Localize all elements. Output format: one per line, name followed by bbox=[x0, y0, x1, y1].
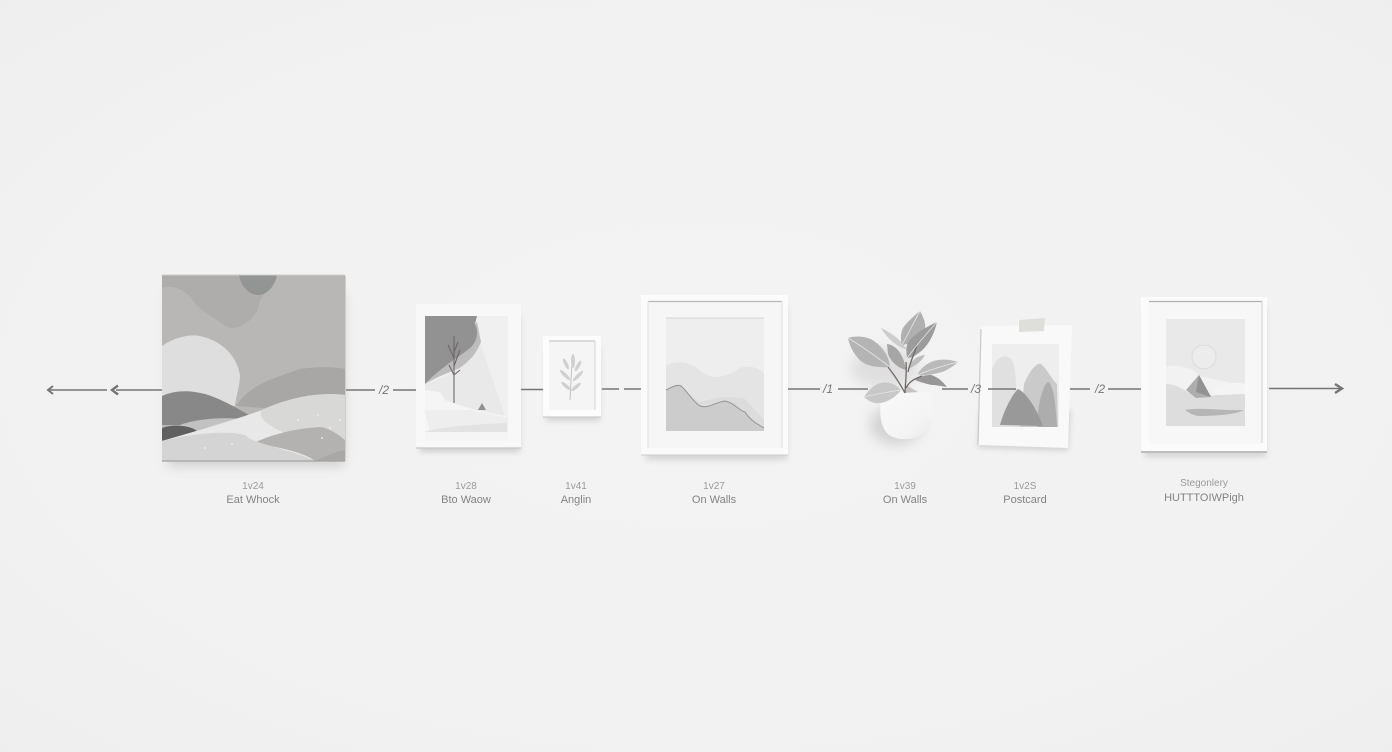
timeline segment crossing the postcard bbox=[970, 382, 1016, 396]
artwork: tent frame bbox=[1141, 297, 1267, 457]
caption: canvas: 1v24 bbox=[242, 481, 264, 492]
caption: small frame: Anglin bbox=[561, 494, 591, 506]
caption: large frame: On Walls bbox=[692, 494, 737, 506]
caption: canvas: Eat Whock bbox=[226, 494, 280, 506]
caption: tent frame: HUTTTOIWPigh bbox=[1164, 492, 1244, 504]
caption: large frame: 1v27 bbox=[703, 481, 725, 492]
caption: small frame bbox=[561, 481, 591, 506]
caption: tree print: Bto Waow bbox=[441, 494, 491, 506]
artwork: small botanical frame bbox=[543, 336, 601, 421]
step labels on the line bbox=[378, 382, 1105, 397]
caption: tent frame: Stegonlery bbox=[1180, 478, 1228, 489]
caption: postcard: 1v2S bbox=[1014, 481, 1037, 492]
plant in wall pot bbox=[848, 311, 958, 445]
caption: plant: 1v39 bbox=[894, 481, 916, 492]
caption: small frame: 1v41 bbox=[565, 481, 587, 492]
timeline segment crossing the postcard: /3 bbox=[970, 382, 981, 396]
caption: large frame bbox=[692, 481, 737, 506]
step labels on the line: /1 bbox=[822, 382, 833, 396]
caption: tree print bbox=[441, 481, 491, 506]
caption: plant bbox=[883, 481, 928, 506]
step labels on the line: /2 bbox=[1094, 382, 1105, 396]
caption: plant: On Walls bbox=[883, 494, 928, 506]
artwork: canvas landscape bbox=[162, 275, 346, 466]
caption: postcard: Postcard bbox=[1003, 494, 1047, 506]
timeline line with arrows bbox=[48, 384, 1342, 394]
artwork: taped postcard bbox=[978, 318, 1072, 451]
caption: canvas bbox=[226, 481, 280, 506]
caption: tent frame bbox=[1164, 478, 1244, 504]
artwork: large landscape frame bbox=[641, 295, 788, 460]
caption: postcard bbox=[1003, 481, 1047, 506]
caption: tree print: 1v28 bbox=[455, 481, 477, 492]
step labels on the line: /2 bbox=[378, 383, 389, 397]
artwork: tree print bbox=[416, 304, 521, 452]
